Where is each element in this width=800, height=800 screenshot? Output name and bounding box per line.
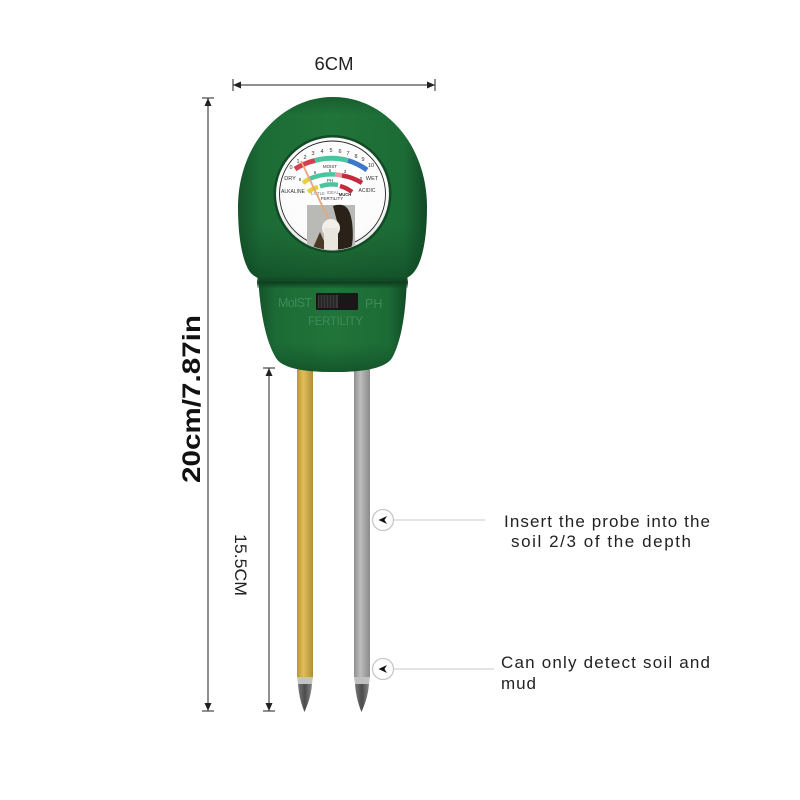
callout: insert the probe: Insert the probe into the [504, 512, 710, 531]
switch labels: MoIST [278, 296, 312, 310]
dial labels: WET [366, 176, 379, 182]
switch labels: PH [365, 297, 382, 311]
dial labels: PH [327, 178, 333, 183]
mechanism [307, 205, 355, 252]
meter body [238, 97, 427, 372]
dial labels: 5 [329, 168, 332, 173]
probe: silver [354, 360, 370, 712]
body seam [257, 277, 408, 288]
dial [274, 135, 392, 253]
dial labels: MOIST [323, 164, 337, 169]
dial labels: 3 [344, 169, 347, 174]
scale: ph [303, 174, 362, 183]
dial labels: 4 [320, 149, 324, 155]
probe: gold [297, 360, 313, 712]
dial labels: FERTILITY [321, 196, 343, 201]
dial labels: 2 [303, 155, 307, 161]
dial labels: 9 [361, 157, 365, 163]
dimension: 20cm: 20cm/7.87in [178, 315, 206, 483]
switch labels [278, 296, 382, 328]
dial labels: ACIDIC [359, 188, 376, 194]
dial labels: 6 [314, 170, 317, 175]
dial labels: 8 [354, 154, 358, 160]
dial needle [301, 161, 328, 218]
dial labels: ALKALINE [281, 189, 306, 195]
dimension: 15.5CM: 15.5CM [231, 534, 250, 596]
dimension: 6CM: 6CM [314, 54, 354, 74]
dial labels: IDEAL [327, 190, 340, 195]
dial labels: 8 [299, 177, 302, 182]
dial labels: 3 [311, 151, 315, 157]
dial labels: 0 [360, 176, 363, 181]
callout: insert the probe [372, 510, 710, 551]
dial labels: 10 [368, 163, 374, 169]
lower body [258, 276, 407, 372]
dial labels: DRY [284, 176, 296, 182]
callout: soil and mud only: Can only detect soil and [501, 653, 710, 672]
dial labels: 7 [346, 151, 350, 157]
callout: soil and mud only: mud [501, 674, 536, 693]
mode switch [316, 293, 358, 310]
dimension: 20cm [178, 98, 214, 711]
dial labels [281, 148, 379, 201]
switch labels: FERTILITY [308, 316, 363, 328]
callout: soil and mud only [372, 653, 710, 693]
dial labels: LITTLE [311, 191, 325, 196]
soil meter dimension infographic [182, 57, 710, 712]
dial labels: MUCH [339, 192, 351, 197]
dimension: 15.5CM [231, 368, 275, 711]
scale: moist [295, 158, 367, 170]
upper body [238, 97, 427, 280]
dimension: 6CM [233, 54, 435, 91]
scale: fertility [308, 184, 352, 192]
dial labels: 6 [338, 149, 342, 155]
dial labels: 1 [296, 159, 300, 165]
dial labels: 0 [289, 165, 293, 171]
dial labels: 5 [329, 148, 333, 154]
callout: insert the probe: soil 2/3 of the depth [511, 532, 691, 551]
